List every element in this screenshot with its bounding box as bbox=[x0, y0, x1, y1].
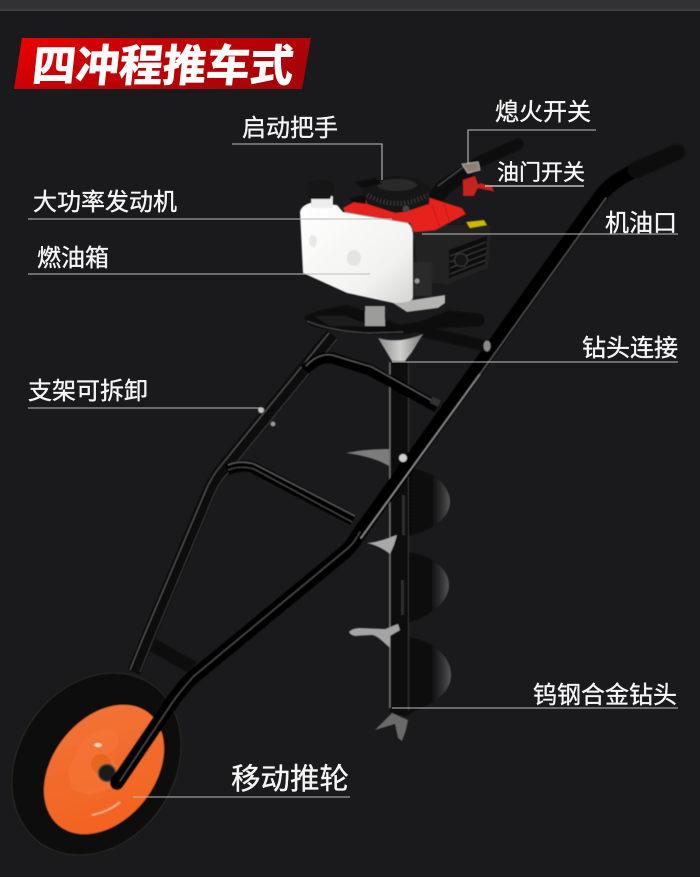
label: 启动把手: 启动把手 bbox=[242, 115, 338, 142]
label: 大功率发动机: 大功率发动机 bbox=[33, 189, 177, 216]
label: 支架可拆卸: 支架可拆卸 bbox=[28, 378, 148, 405]
label: 启动把手 bbox=[232, 115, 382, 180]
label: 钨钢合金钻头: 钨钢合金钻头 bbox=[533, 682, 677, 709]
red engine cover bbox=[343, 197, 466, 232]
title banner: 四冲程推车式 bbox=[30, 43, 296, 91]
label: 熄火开关 bbox=[468, 99, 596, 164]
label: 移动推轮: 移动推轮 bbox=[231, 763, 349, 796]
auger drill bbox=[346, 360, 451, 741]
engine mount frame bbox=[305, 295, 490, 361]
label: 燃油箱: 燃油箱 bbox=[37, 245, 109, 272]
label: 钻头连接: 钻头连接 bbox=[582, 335, 678, 362]
fuel tank bbox=[300, 203, 413, 303]
wheel bbox=[0, 640, 216, 877]
push handle bbox=[117, 144, 677, 783]
fuel cap bbox=[307, 181, 334, 208]
label: 熄火开关: 熄火开关 bbox=[495, 99, 591, 126]
throttle lever bbox=[462, 162, 494, 196]
engine block bbox=[414, 220, 491, 296]
recoil starter bbox=[350, 177, 430, 213]
label: 机油口: 机油口 bbox=[605, 210, 677, 237]
rear frame and cross braces bbox=[130, 304, 441, 672]
top strip bbox=[0, 0, 700, 11]
label: 油门开关: 油门开关 bbox=[497, 160, 585, 185]
